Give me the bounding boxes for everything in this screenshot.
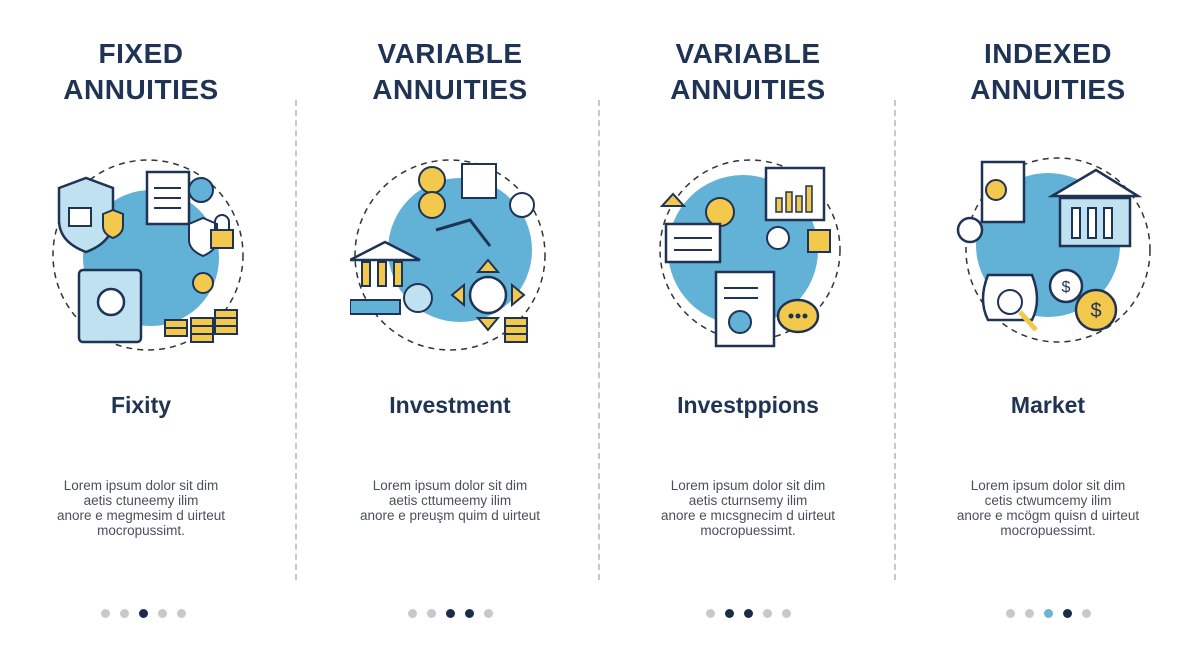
title: ANNUITIES — [670, 74, 826, 105]
title — [670, 38, 826, 105]
title: FIXED — [99, 38, 183, 69]
icon: bank, money bags, magnifier: $ — [1062, 279, 1071, 296]
icon: safe, shield, coins — [52, 159, 244, 351]
body text: mocropuessimt. — [1000, 523, 1096, 538]
icon: bank, money bags, magnifier: $ — [1090, 300, 1102, 322]
subtitle: Investppions — [677, 392, 819, 418]
title: VARIABLE — [675, 38, 821, 69]
title — [63, 38, 219, 105]
body text: anore e mıcsgnecim d uirteut — [661, 508, 835, 523]
subtitle: Fixity — [111, 392, 171, 418]
panel: indexed annuities — [956, 38, 1151, 618]
pagination dots — [706, 609, 791, 618]
panel: fixed annuities — [52, 38, 244, 618]
panel: variable annuities investpions — [659, 38, 841, 618]
panel: variable annuities investment — [350, 38, 546, 618]
body text: aetis cttumeemy ilim — [389, 493, 511, 508]
pagination dots — [408, 609, 493, 618]
body text — [57, 478, 225, 538]
title — [970, 38, 1126, 105]
body text: Lorem ipsum dolor sit dim — [373, 478, 527, 493]
body text — [661, 478, 835, 538]
pagination dots — [101, 609, 186, 618]
body text: Lorem ipsum dolor sit dim — [671, 478, 825, 493]
icon: bank, money bags, magnifier — [956, 157, 1151, 343]
subtitle: Investment — [389, 392, 511, 418]
subtitle: Market — [1011, 392, 1085, 418]
body text: anore e mcögm quisn d uirteut — [957, 508, 1139, 523]
icon: charts, documents, chat — [659, 159, 841, 348]
body text: aetis ctuneemy ilim — [84, 493, 198, 508]
title: ANNUITIES — [63, 74, 219, 105]
title: VARIABLE — [377, 38, 523, 69]
body text: Lorem ipsum dolor sit dim — [64, 478, 218, 493]
body text: cetis ctwumcemy ilim — [985, 493, 1111, 508]
pagination dots — [1006, 609, 1091, 618]
body text — [957, 478, 1140, 538]
icon: bank, coins, arrows — [350, 159, 546, 351]
body text — [360, 478, 540, 523]
title: ANNUITIES — [372, 74, 528, 105]
body text: Lorem ipsum dolor sit dim — [971, 478, 1125, 493]
title: ANNUITIES — [970, 74, 1126, 105]
body text: mocropussimt. — [97, 523, 185, 538]
body text: aetis cturnsemy ilim — [689, 493, 807, 508]
title — [372, 38, 528, 105]
title: INDEXED — [984, 38, 1112, 69]
body text: anore e preuşm quim d uirteut — [360, 508, 540, 523]
body text: anore e megmesim d uirteut — [57, 508, 225, 523]
body text: mocropuessimt. — [700, 523, 796, 538]
